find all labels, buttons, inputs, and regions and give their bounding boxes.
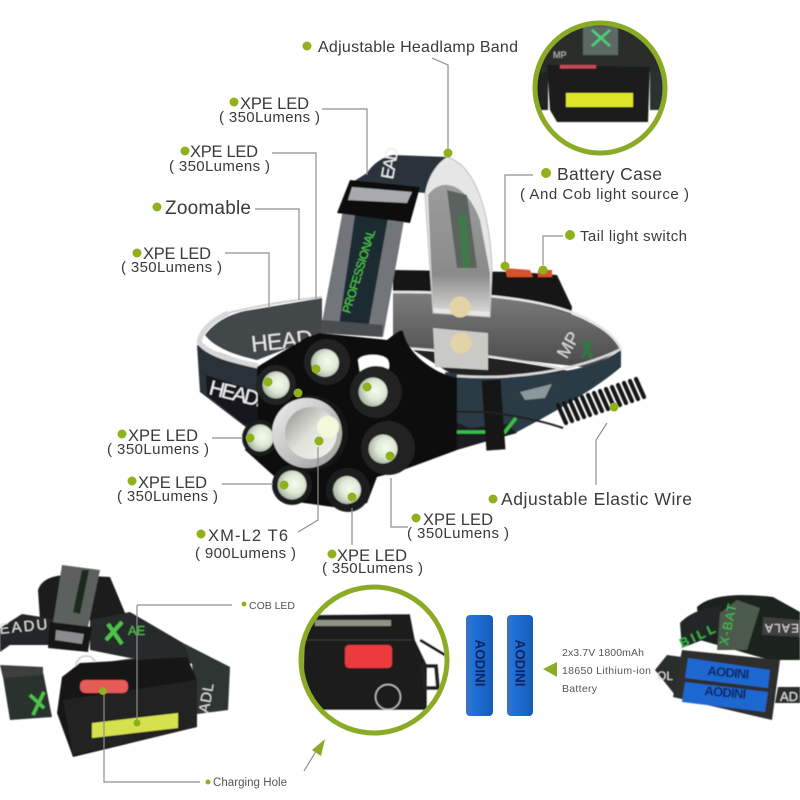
cable — [393, 410, 563, 428]
lower overhead band — [320, 210, 405, 337]
COB panel — [92, 713, 178, 738]
label: XPE LED 2: XPE LED — [190, 143, 258, 161]
bottom-right lamp photo: OL — [657, 669, 673, 683]
label: XM-L2 T6: ( 900Lumens ) — [195, 545, 296, 562]
label: XM-L2 T6 — [195, 527, 296, 562]
lower translucent tab — [433, 328, 488, 370]
blue cells — [685, 658, 770, 688]
lamp body — [245, 330, 457, 508]
snap buttons — [450, 296, 472, 354]
bottom-right lamp photo: AD — [780, 689, 798, 704]
label: battery case: ( And Cob light source ) — [520, 186, 689, 203]
left inner band — [205, 298, 322, 360]
lamp head behind — [697, 595, 800, 660]
central zoom lens — [272, 395, 348, 471]
battery specification text — [562, 647, 651, 695]
bottom-right lamp photo: X-BAT — [716, 602, 740, 647]
label: zoomable: Zoomable — [165, 198, 251, 219]
top band left — [0, 614, 60, 652]
key ring — [76, 656, 96, 676]
label: XPE LED 3: ( 350Lumens ) — [121, 259, 222, 276]
label: adjustable headlamp band: Adjustable Headlamp Band — [318, 39, 518, 56]
right near band — [445, 349, 621, 450]
translucent overhead strap — [425, 157, 492, 317]
rear band print: MP — [553, 328, 584, 362]
bottom-right lamp photo — [655, 595, 800, 720]
main headlamp photo: PROFESSIONAL — [339, 227, 378, 315]
bottom-right lamp photo: BILL — [677, 621, 718, 651]
label: adjustable elastic wire: Adjustable Elastic Wire — [501, 489, 692, 509]
main headlamp photo — [197, 146, 644, 512]
strap buckle — [48, 622, 92, 652]
label: XPE LED 1: ( 350Lumens ) — [219, 109, 320, 126]
label: XPE LED 6 — [322, 547, 423, 577]
battery cell 1 — [466, 615, 493, 716]
label: XPE LED 6: ( 350Lumens ) — [322, 560, 423, 577]
clip — [107, 656, 157, 677]
label: XPE LED 2 — [169, 143, 270, 175]
callout dots on main lamp — [246, 148, 618, 502]
overhead strap — [717, 600, 760, 650]
main headlamp photo: EAD — [377, 146, 402, 181]
battery specification text: 18650 Lithium-ion — [562, 665, 651, 677]
label: XPE LED 2: ( 350Lumens ) — [169, 158, 270, 175]
label: XPE LED 4: XPE LED — [128, 427, 198, 445]
label: XPE LED 3 — [121, 245, 222, 276]
label: XPE LED 7: ( 350Lumens ) — [407, 525, 509, 542]
small LED heads — [242, 339, 415, 512]
battery case rear — [393, 270, 572, 325]
lower right band — [775, 687, 800, 703]
pointer triangle — [543, 662, 557, 677]
bottom-right lamp photo: EALA — [765, 621, 799, 635]
rear inner band — [393, 292, 620, 368]
bottom-left lamp photo: EADU — [0, 616, 48, 638]
lower left band — [655, 655, 682, 695]
bottom-left lamp photo — [0, 565, 230, 757]
label: XPE LED 5 — [117, 474, 218, 505]
label: XPE LED 4 — [107, 427, 209, 458]
label: XPE LED 5: ( 350Lumens ) — [117, 488, 218, 505]
main headlamp photo: HEADL — [207, 377, 271, 413]
inset circle: cob light — [530, 20, 670, 153]
label: XPE LED 3: XPE LED — [143, 245, 211, 263]
label: COB LED: COB LED — [249, 600, 295, 612]
left near band — [197, 345, 258, 428]
battery case — [57, 657, 197, 757]
top band right — [90, 612, 197, 664]
battery cell 2 — [507, 615, 533, 716]
inset circle: cob light: MP — [553, 50, 566, 60]
battery specification text: Battery — [562, 683, 598, 695]
right band top — [762, 617, 800, 637]
label: XPE LED 7 — [407, 511, 509, 542]
label: battery case — [520, 164, 689, 203]
label: XPE LED 6: XPE LED — [337, 547, 407, 565]
red switches — [505, 268, 533, 277]
back of lamp head — [38, 575, 128, 620]
label: tail light switch: Tail light switch — [580, 228, 687, 245]
inset circle: charging hole — [295, 585, 455, 735]
battery specification text: 2x3.7V 1800mAh — [562, 647, 644, 659]
buckle — [337, 180, 420, 223]
label: XM-L2 T6: XM-L2 T6 — [208, 527, 288, 545]
leader lines — [212, 58, 607, 545]
open battery case — [673, 650, 780, 720]
label: charging hole: Charging Hole — [213, 777, 287, 789]
bottom-left lamp photo: ADL — [196, 682, 218, 714]
green-print band — [680, 606, 722, 648]
battery cell 2: AODINI — [512, 640, 528, 686]
bottom-right lamp photo: AODINI — [704, 683, 747, 702]
upper overhead band — [348, 155, 447, 193]
label: XPE LED 7: XPE LED — [423, 511, 493, 529]
bottom-right lamp photo: AODINI — [707, 663, 750, 682]
battery cell 1: AODINI — [472, 640, 488, 686]
red switch — [80, 680, 128, 693]
label: XPE LED 4: ( 350Lumens ) — [107, 441, 209, 458]
callouts: bottom-left lamp — [99, 605, 232, 782]
coil wire — [558, 379, 644, 423]
label: battery case: Battery Case — [557, 164, 662, 184]
bottom-left lamp photo: AE — [128, 623, 146, 638]
label: XPE LED 5: XPE LED — [138, 474, 207, 492]
right side band — [183, 643, 230, 714]
arrow to inset — [304, 739, 325, 771]
label: XPE LED 1: XPE LED — [240, 95, 309, 113]
lower left band — [3, 672, 52, 720]
label: XPE LED 1 — [219, 95, 320, 126]
overhead strap — [53, 565, 100, 627]
main headlamp photo: HEAD — [250, 325, 314, 357]
